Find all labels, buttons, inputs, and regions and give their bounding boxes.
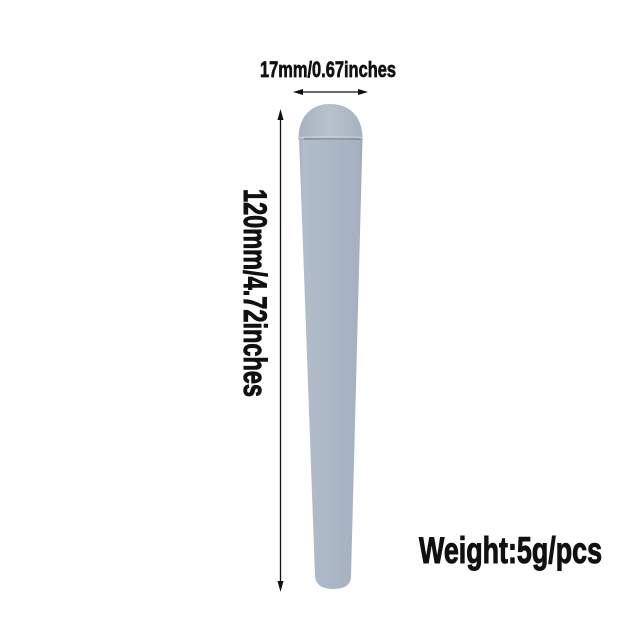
tube product bbox=[298, 104, 363, 589]
cap lip bbox=[299, 137, 362, 139]
width arrow bbox=[293, 89, 368, 95]
tube body bbox=[299, 137, 362, 589]
height arrow bbox=[278, 109, 284, 592]
height label: 120mm/4.72inches bbox=[237, 189, 273, 397]
tube cap bbox=[298, 104, 363, 140]
width label: 17mm/0.67inches bbox=[260, 57, 396, 82]
